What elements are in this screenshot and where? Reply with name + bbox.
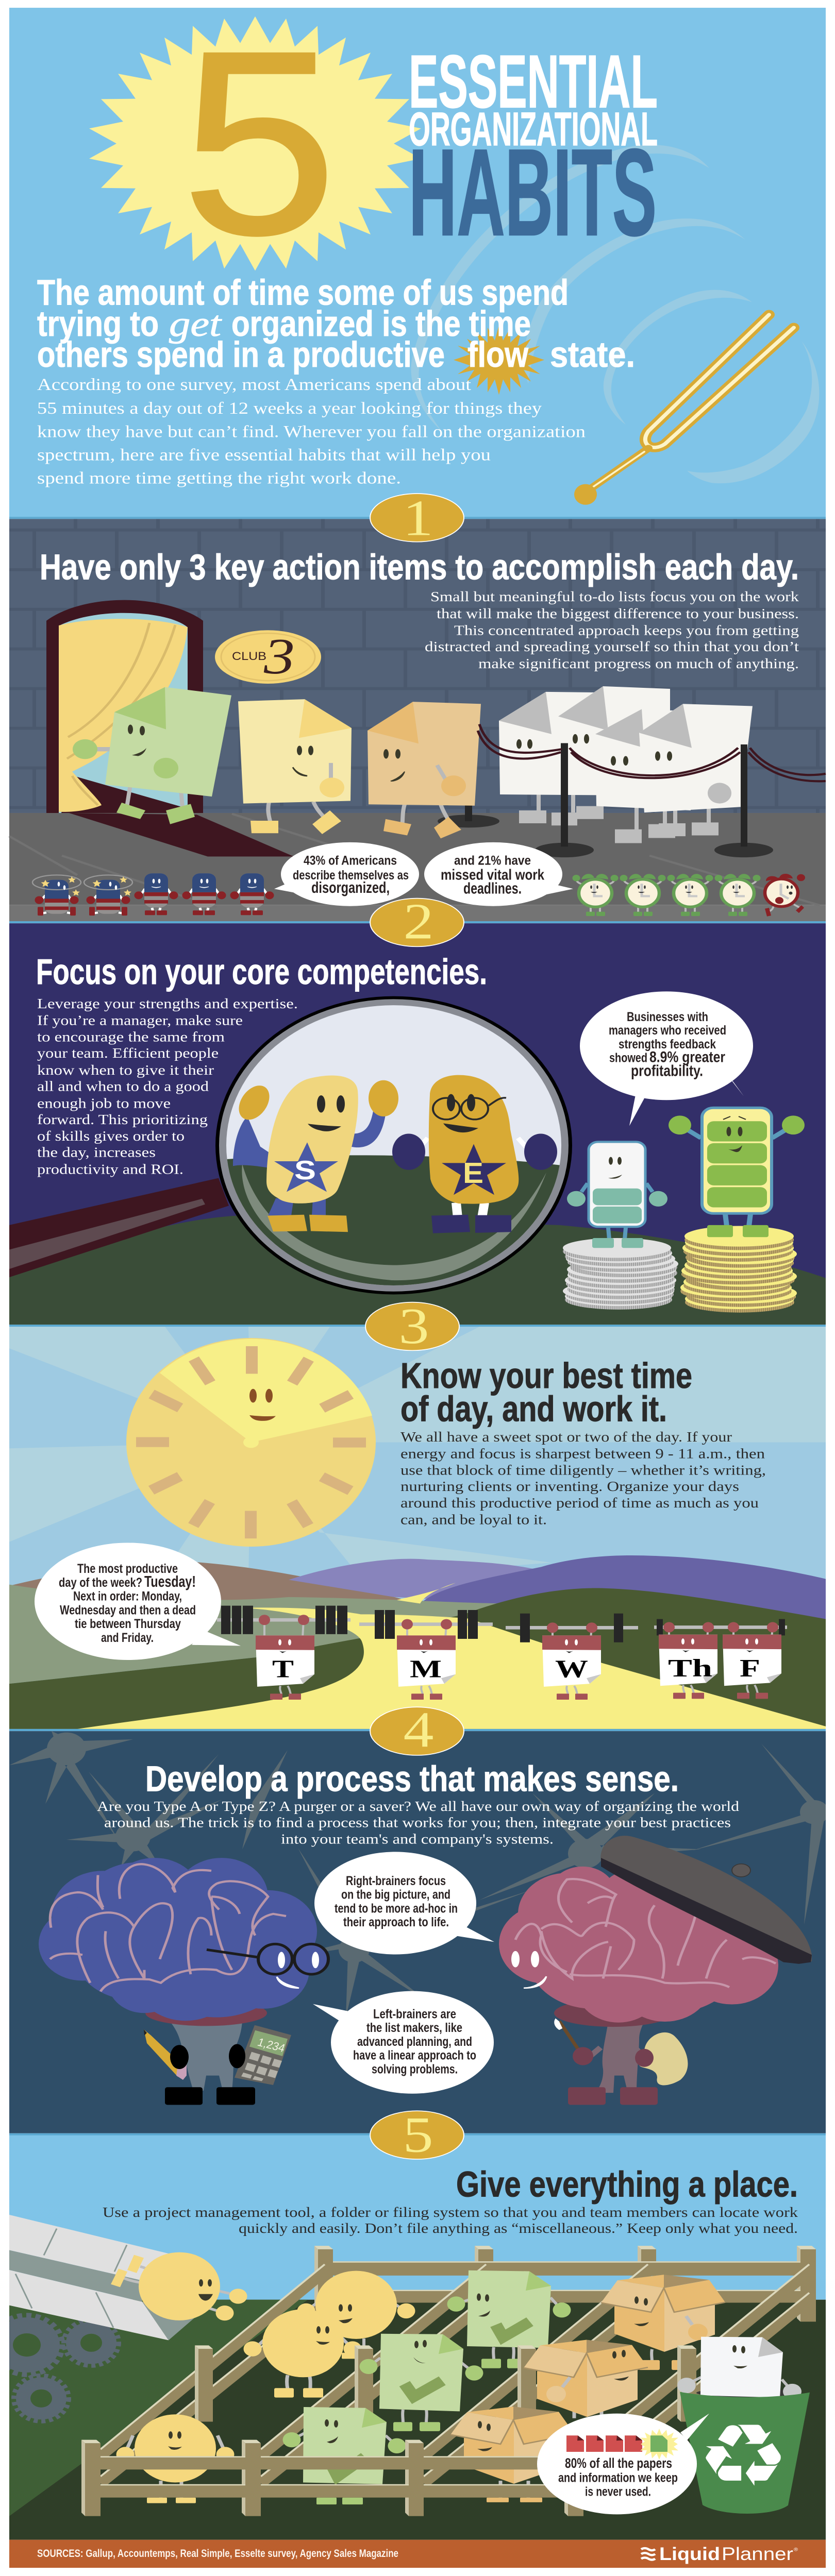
character: ball 1 at chute bbox=[111, 2252, 247, 2320]
speech bubble: right-brainers: tend to be more ad-hoc in bbox=[335, 1901, 458, 1916]
headline: The amount of time some of us spend bbox=[37, 273, 569, 313]
body text: We all have a sweet spot or two of the day. If your bbox=[400, 1429, 732, 1445]
icon: paintbrush and palette bbox=[555, 2019, 688, 2105]
icon: beret bbox=[600, 1836, 812, 1964]
body text: Are you Type A or Type Z? A purger or a saver? We all have our own way of organizing the world bbox=[97, 1798, 739, 1814]
calendar T with barbell: T bbox=[272, 1655, 294, 1683]
sunburst rays bbox=[9, 1327, 826, 1578]
ground hill bbox=[9, 1215, 826, 1325]
glasses and face bbox=[207, 1944, 328, 1988]
stat bubbles: missed vital work bbox=[441, 867, 544, 883]
magnifier handle bbox=[9, 1178, 229, 1277]
logo: LiquidPlanner: Planner bbox=[722, 2544, 793, 2564]
body text bbox=[103, 2205, 798, 2236]
icons: clocks bbox=[572, 874, 805, 917]
body text: This concentrated approach keeps you from getting bbox=[454, 622, 799, 638]
number badge 5 bbox=[370, 2107, 464, 2163]
speech bubble: right-brainers: Right-brainers focus bbox=[346, 1873, 446, 1888]
body text: enough job to move bbox=[37, 1095, 171, 1111]
number badge 4: 4 bbox=[404, 1701, 433, 1758]
character: ball 3 bbox=[243, 2309, 362, 2398]
callout: 80% of papers: and information we keep bbox=[558, 2470, 678, 2485]
calendar M with barbell: M bbox=[410, 1655, 442, 1683]
speech bubble: strengths: Businesses with bbox=[627, 1009, 708, 1024]
body text: quickly and easily. Don’t file anything as “miscellaneous.” Keep only what you need. bbox=[239, 2220, 798, 2236]
character: paper A bbox=[447, 2270, 571, 2368]
intro text: spectrum, here are five essential habits that will help you bbox=[37, 446, 491, 464]
sound wave swirls bbox=[411, 145, 819, 483]
icon: flow burst bbox=[454, 326, 544, 395]
character: paper B bbox=[360, 2334, 483, 2431]
body text: use that block of time diligently – whether it’s writing, bbox=[400, 1462, 766, 1478]
body text: around this productive period of time as much as you bbox=[400, 1495, 759, 1511]
character: green battery bbox=[669, 1108, 805, 1237]
logo: LiquidPlanner: Liquid bbox=[659, 2544, 720, 2564]
body text: all and when to do a good bbox=[37, 1078, 209, 1094]
stat bubbles: 43% of Americans bbox=[304, 853, 397, 868]
character: white battery bbox=[567, 1142, 667, 1248]
body text: Leverage your strengths and expertise. bbox=[37, 995, 298, 1011]
calendar W with barbell: W bbox=[555, 1655, 588, 1683]
speech bubble: strengths: 8.9% greater bbox=[649, 1048, 725, 1065]
coin stack: gold bbox=[680, 1226, 797, 1313]
calendar T with barbell bbox=[217, 1606, 350, 1700]
speech bubble: strengths: showed bbox=[609, 1050, 647, 1065]
title bbox=[409, 40, 658, 261]
neuron background bbox=[9, 1731, 829, 2018]
speech bubble: left-brainers: Left-brainers are bbox=[373, 2007, 456, 2021]
logo: LiquidPlanner bbox=[641, 2544, 798, 2564]
stat bubbles: and 21% have bbox=[454, 853, 531, 868]
panel: intro bbox=[9, 0, 826, 519]
velvet ropes and posts bbox=[478, 724, 826, 846]
calendars Th and F with barbell bbox=[654, 1619, 787, 1699]
headline: organized is the time bbox=[231, 304, 531, 344]
number badge 2 bbox=[370, 893, 464, 950]
speech bubble: most productive day: Tuesday! bbox=[144, 1573, 196, 1590]
callout: 80% of papers: is never used. bbox=[585, 2484, 651, 2499]
logo: LiquidPlanner: ® bbox=[794, 2547, 798, 2552]
rope stands bbox=[438, 802, 773, 857]
headline: flow bbox=[467, 335, 528, 375]
group of white papers bbox=[499, 686, 753, 843]
body text bbox=[97, 1798, 739, 1847]
speech bubble: right-brainers: their approach to life. bbox=[343, 1914, 449, 1929]
white paper in bin bbox=[677, 2337, 801, 2399]
panel: habit 4 bbox=[0, 1701, 829, 2568]
body text: nurturing clients or inventing. Organize your days bbox=[400, 1479, 739, 1494]
body text: productivity and ROI. bbox=[37, 1161, 183, 1177]
intro text bbox=[37, 375, 586, 487]
icon: document row bbox=[566, 2429, 678, 2460]
stat bubbles: deadlines. bbox=[463, 880, 522, 897]
number badge 3: 3 bbox=[399, 1298, 429, 1354]
panel: habit 1 bbox=[9, 489, 826, 923]
body text: Small but meaningful to-do lists focus you on the work bbox=[430, 589, 799, 605]
intro text: know they have but can’t find. Wherever you fall on the organization bbox=[37, 422, 586, 441]
character: paper C bbox=[282, 2407, 406, 2504]
speech bubble: left-brainers: advanced planning, and bbox=[357, 2034, 472, 2048]
intro text: 55 minutes a day out of 12 weeks a year looking for things they bbox=[37, 399, 542, 417]
body text: of skills gives order to bbox=[37, 1128, 185, 1144]
speech bubble: left-brainers: solving problems. bbox=[372, 2062, 458, 2076]
calendar W with barbell bbox=[506, 1614, 638, 1700]
body text: to encourage the same from bbox=[37, 1029, 225, 1045]
speech bubble: most productive day: and Friday. bbox=[101, 1630, 154, 1645]
fence: back rails and posts bbox=[314, 2246, 816, 2321]
calendar M with barbell bbox=[359, 1610, 493, 1700]
icon: sun burst bbox=[89, 16, 421, 270]
body text: make significant progress on much of anything. bbox=[478, 655, 799, 671]
body text: can, and be loyal to it. bbox=[400, 1512, 547, 1528]
speech bubble: left-brainers bbox=[313, 1991, 494, 2094]
icon: calculator: 1,234 bbox=[256, 2036, 287, 2055]
intro text: According to one survey, most Americans spend about bbox=[37, 375, 471, 394]
headline: state. bbox=[550, 335, 635, 375]
character: orange paper bbox=[368, 702, 481, 838]
icon: tuning fork bbox=[574, 315, 794, 505]
calendars Th and F with barbell: F bbox=[740, 1654, 760, 1682]
clock face bbox=[126, 1338, 376, 1547]
headline: trying to bbox=[37, 304, 159, 344]
heading: Focus on your core competencies. bbox=[36, 952, 487, 992]
character: green paper bbox=[73, 687, 231, 824]
stat bubbles: disorganized, bbox=[311, 879, 390, 896]
body text: If you’re a manager, make sure bbox=[37, 1012, 243, 1028]
icons: disorganized characters bbox=[32, 873, 274, 916]
number badge 1: 1 bbox=[403, 489, 433, 546]
character: ball 2 bbox=[297, 2271, 415, 2359]
speech bubble: left-brainers: the list makers, like bbox=[366, 2020, 462, 2035]
body text bbox=[425, 589, 799, 671]
intro text: spend more time getting the right work done. bbox=[37, 469, 401, 487]
number badge 2: 2 bbox=[404, 893, 433, 950]
body text: know when to give it their bbox=[37, 1062, 214, 1078]
fence: front rails and posts bbox=[81, 2440, 583, 2516]
character: left brain bbox=[39, 1701, 812, 2105]
character: box B bbox=[524, 2340, 648, 2418]
speech bubble: right-brainers: on the big picture, and bbox=[341, 1887, 450, 1902]
body text: into your team's and company's systems. bbox=[281, 1831, 554, 1847]
icon: club 3 medal bbox=[215, 628, 321, 685]
speech bubble: strengths: managers who received bbox=[609, 1023, 726, 1037]
speech bubble: most productive day: Wednesday and then a dead bbox=[60, 1603, 196, 1617]
icon: chute bbox=[9, 2215, 218, 2340]
icon: recycling bin bbox=[680, 2392, 810, 2514]
speech bubble: most productive day: The most productive bbox=[77, 1561, 178, 1575]
panel: habit 2 bbox=[9, 893, 826, 1325]
body text: the day, increases bbox=[37, 1144, 156, 1160]
landscape hills and road bbox=[9, 1555, 826, 1729]
callout: 80% of papers bbox=[537, 2414, 709, 2514]
body text: distracted and spreading yourself so thin that you don’t bbox=[425, 639, 799, 655]
character: box C bbox=[450, 2406, 575, 2502]
character: box A bbox=[601, 2275, 725, 2370]
magnifying glass bbox=[215, 996, 572, 1295]
body text: your team. Efficient people bbox=[37, 1045, 219, 1061]
speech bubble: most productive day: Next in order: Monday, bbox=[73, 1589, 182, 1603]
footer bbox=[9, 2540, 826, 2568]
stat bubbles bbox=[274, 842, 573, 906]
number badge 4 bbox=[370, 1701, 464, 1758]
calendars Th and F with barbell: Th bbox=[668, 1654, 712, 1682]
body text: energy and focus is sharpest between 9 - 11 a.m., then bbox=[400, 1446, 765, 1462]
speech bubble: strengths: strengths feedback bbox=[619, 1037, 716, 1051]
character: strength: S bbox=[294, 1156, 316, 1185]
character: strength bbox=[233, 1076, 398, 1232]
headline bbox=[37, 273, 635, 375]
icon: red alarm clock bbox=[765, 874, 805, 917]
callout: 80% of papers: 80% of all the papers bbox=[565, 2455, 672, 2471]
big number 5: 5 bbox=[181, 0, 337, 289]
icon: recycling bin: ♻ bbox=[697, 2406, 790, 2506]
icon: gears bbox=[0, 2315, 119, 2421]
icon: club 3 medal: CLUB bbox=[232, 650, 266, 663]
headline: get bbox=[169, 304, 222, 344]
icon: pencil bbox=[144, 2029, 187, 2080]
character: expertise: E bbox=[463, 1157, 483, 1190]
icon: club 3 medal: 3 bbox=[263, 628, 295, 685]
headline: others spend in a productive bbox=[37, 335, 445, 375]
fence: middle posts bbox=[195, 2345, 696, 2421]
body text: around us. The trick is to find a process that works for you; then, integrate your best practices bbox=[104, 1815, 731, 1831]
speech bubble: most productive day bbox=[35, 1543, 241, 1660]
body text bbox=[37, 995, 298, 1177]
body text bbox=[400, 1429, 766, 1528]
character: expertise bbox=[392, 1075, 557, 1233]
number badge 1 bbox=[370, 489, 464, 546]
coin stack: silver bbox=[563, 1238, 678, 1310]
panel: habit 5 bbox=[0, 2107, 826, 2540]
fence: diagonal rails bbox=[101, 2264, 809, 2483]
heading: of day, and work it. bbox=[400, 1389, 667, 1429]
character: right brain bbox=[499, 1867, 778, 2093]
number badge 3 bbox=[365, 1298, 459, 1354]
door with curtain and carpet bbox=[46, 600, 294, 856]
body text: forward. This prioritizing bbox=[37, 1112, 208, 1127]
speech bubble: strengths bbox=[580, 991, 753, 1126]
icon: calculator bbox=[235, 2025, 291, 2085]
character: yellow paper bbox=[238, 699, 352, 834]
speech bubble: most productive day: tie between Thursday bbox=[75, 1616, 181, 1631]
heading: Know your best time bbox=[400, 1356, 692, 1396]
speech bubble: most productive day: day of the week? bbox=[59, 1575, 142, 1589]
body text: Use a project management tool, a folder or filing system so that you and team members can locate work bbox=[103, 2205, 798, 2220]
body text: that will make the biggest difference to your business. bbox=[437, 605, 799, 621]
character: ball 4 bbox=[116, 2414, 234, 2503]
sources: SOURCES: Gallup, Accountemps, Real Simple, Esselte survey, Agency Sales Magazine bbox=[37, 2547, 398, 2560]
number badge 5: 5 bbox=[403, 2107, 433, 2163]
speech bubble: strengths: profitability. bbox=[631, 1062, 703, 1080]
panel: habit 3 bbox=[9, 1298, 826, 1729]
stat bubbles: describe themselves as bbox=[293, 868, 409, 882]
speech bubble: left-brainers: have a linear approach to bbox=[353, 2048, 476, 2062]
speech bubble: right-brainers bbox=[314, 1852, 494, 1955]
heading bbox=[400, 1356, 692, 1429]
hands and feet of left brain bbox=[165, 2044, 255, 2105]
